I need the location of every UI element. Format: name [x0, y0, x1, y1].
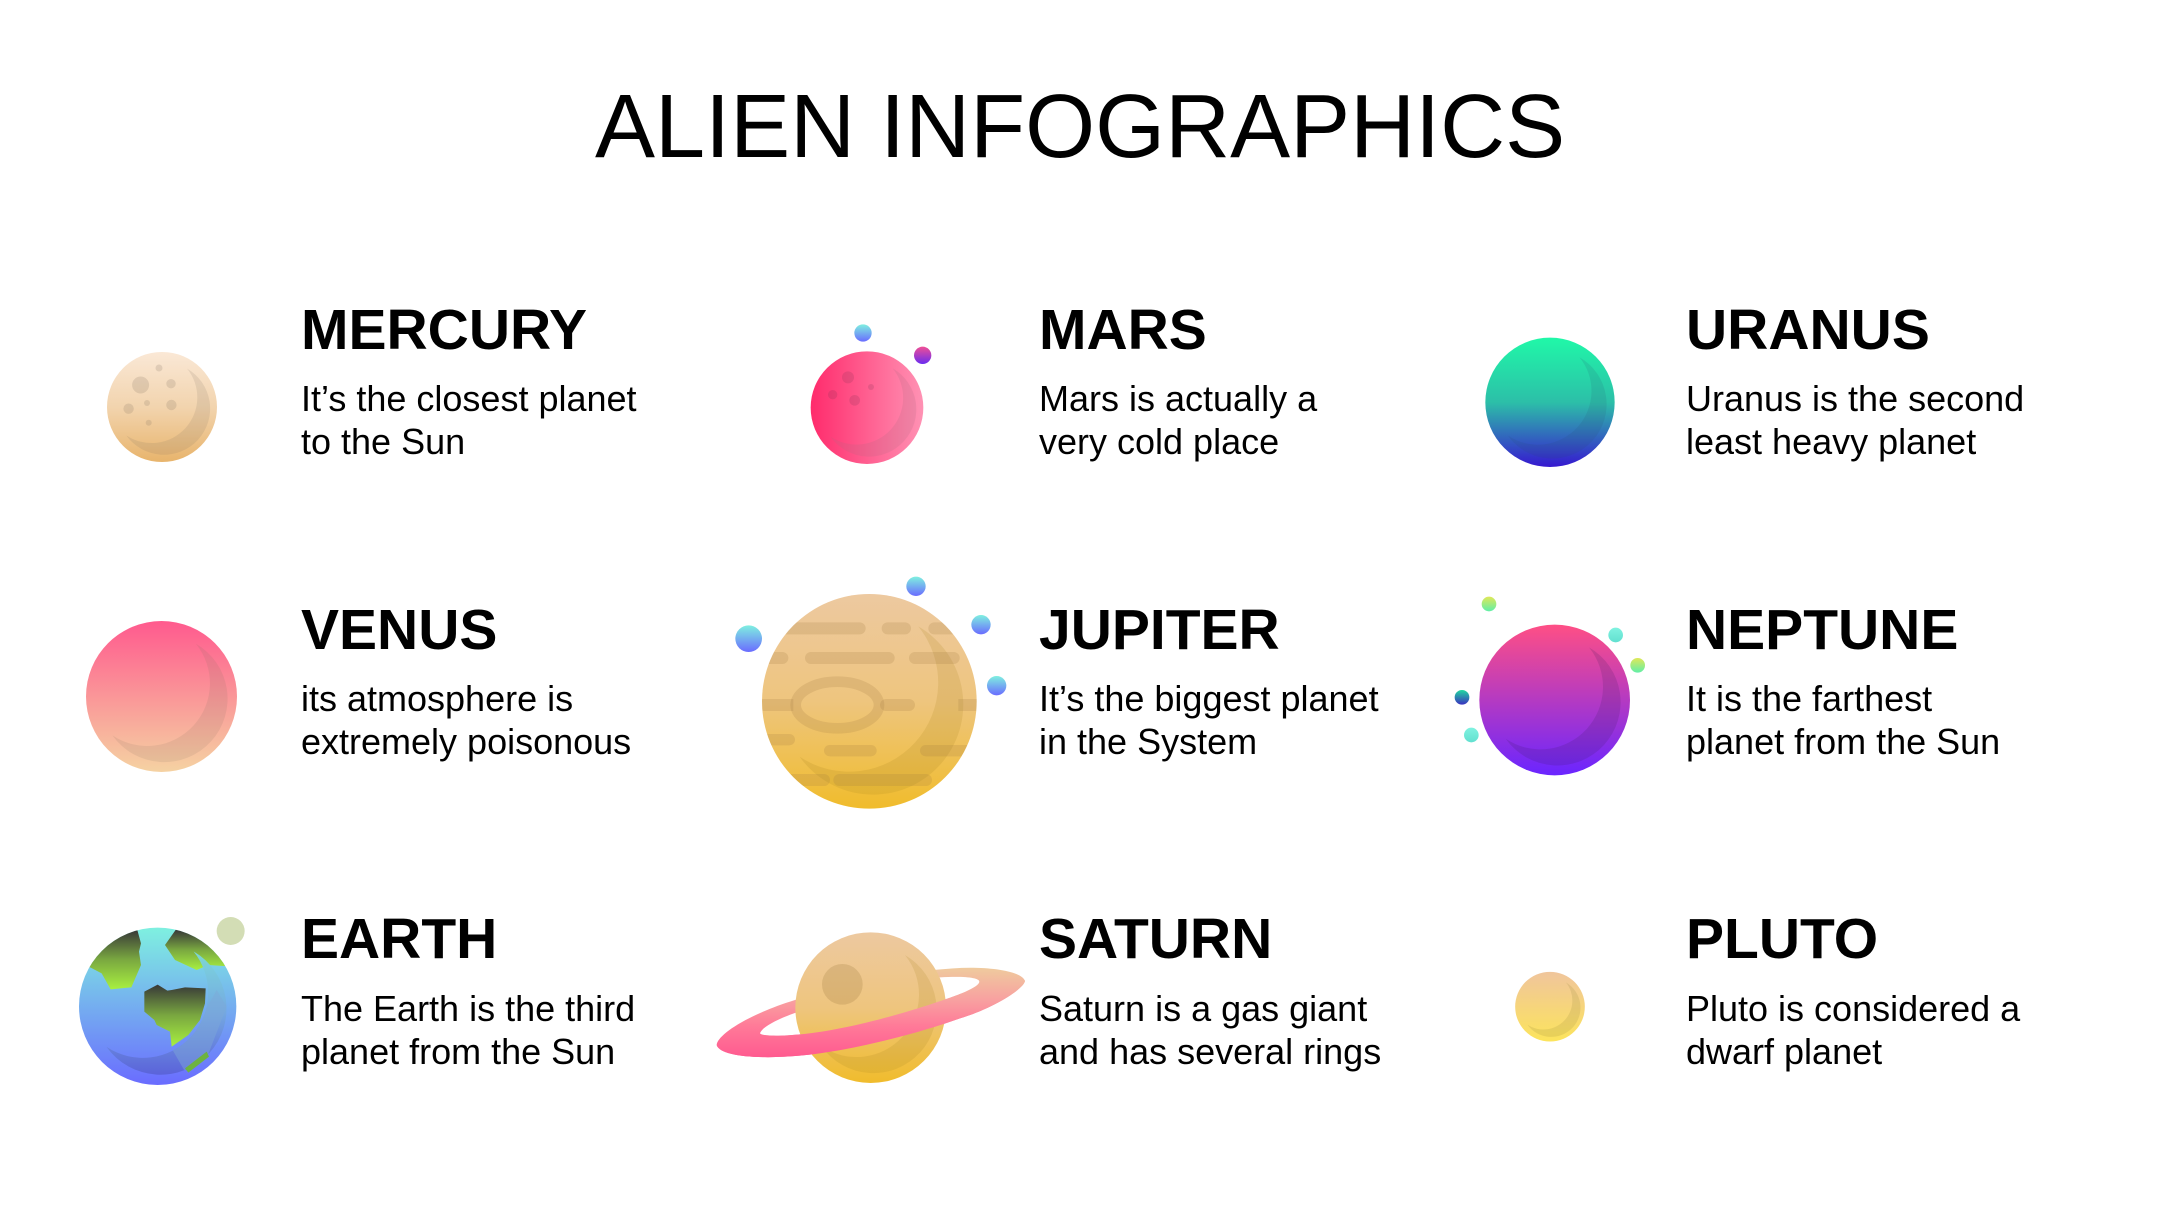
text: earth: The Earth is the third	[301, 988, 635, 1029]
icon: mars planet	[811, 324, 931, 464]
text: saturn: Saturn is a gas giant	[1039, 988, 1367, 1029]
text: saturn	[1039, 907, 1381, 1072]
panel: venus	[86, 598, 631, 772]
panel: mercury	[107, 298, 637, 462]
text: mercury: to the Sun	[301, 421, 465, 462]
panel: jupiter	[735, 577, 1379, 809]
text: neptune: planet from the Sun	[1686, 721, 2000, 762]
panel: earth	[70, 907, 635, 1085]
icon: uranus planet	[1485, 338, 1615, 467]
panel: pluto	[1515, 907, 2021, 1072]
text: uranus	[1686, 298, 2024, 462]
text: pluto: Pluto is considered a	[1686, 988, 2021, 1029]
text: jupiter: in the System	[1039, 721, 1257, 762]
text: pluto: PLUTO	[1686, 907, 1878, 971]
text: neptune	[1686, 598, 2000, 762]
text: pluto	[1686, 907, 2021, 1072]
text: venus: its atmosphere is	[301, 678, 573, 719]
text: saturn: and has several rings	[1039, 1031, 1381, 1072]
panel: mars	[811, 298, 1318, 464]
text: uranus: URANUS	[1686, 298, 1930, 362]
text: mars: very cold place	[1039, 421, 1279, 462]
text: venus: extremely poisonous	[301, 721, 631, 762]
panel: neptune	[1455, 597, 2000, 775]
jupiter storm ring	[796, 682, 879, 728]
text: uranus: least heavy planet	[1686, 421, 1976, 462]
text: earth: planet from the Sun	[301, 1031, 615, 1072]
text: venus	[301, 598, 631, 762]
icon: earth planet	[70, 917, 247, 1085]
text: mars	[1039, 298, 1318, 462]
icon: venus planet	[86, 621, 237, 772]
ring back and sides	[717, 968, 1025, 1057]
text: mars: Mars is actually a	[1039, 378, 1318, 419]
icon: pluto planet	[1515, 972, 1585, 1041]
title: ALIEN INFOGRAPHICS	[595, 77, 1565, 177]
text: mercury	[301, 298, 637, 462]
text: jupiter: It’s the biggest planet	[1039, 678, 1379, 719]
text: pluto: dwarf planet	[1686, 1031, 1882, 1072]
icon: jupiter planet	[735, 577, 1006, 809]
text: venus: VENUS	[301, 598, 497, 662]
text: earth	[301, 907, 635, 1072]
text: jupiter	[1039, 598, 1379, 762]
panel: saturn	[717, 907, 1381, 1083]
text: earth: EARTH	[301, 907, 497, 971]
icon: mercury planet	[107, 352, 217, 462]
text: jupiter: JUPITER	[1039, 598, 1280, 662]
panel: uranus	[1485, 298, 2024, 467]
icon: neptune planet	[1455, 597, 1645, 775]
ring front	[716, 980, 1025, 1058]
text: mercury: It’s the closest planet	[301, 378, 637, 419]
icon: saturn planet with ring	[717, 932, 1025, 1083]
text: mercury: MERCURY	[301, 298, 587, 362]
text: mars: MARS	[1039, 298, 1207, 362]
text: neptune: NEPTUNE	[1686, 598, 1958, 662]
text: saturn: SATURN	[1039, 907, 1272, 971]
text: uranus: Uranus is the second	[1686, 378, 2024, 419]
text: neptune: It is the farthest	[1686, 678, 1932, 719]
